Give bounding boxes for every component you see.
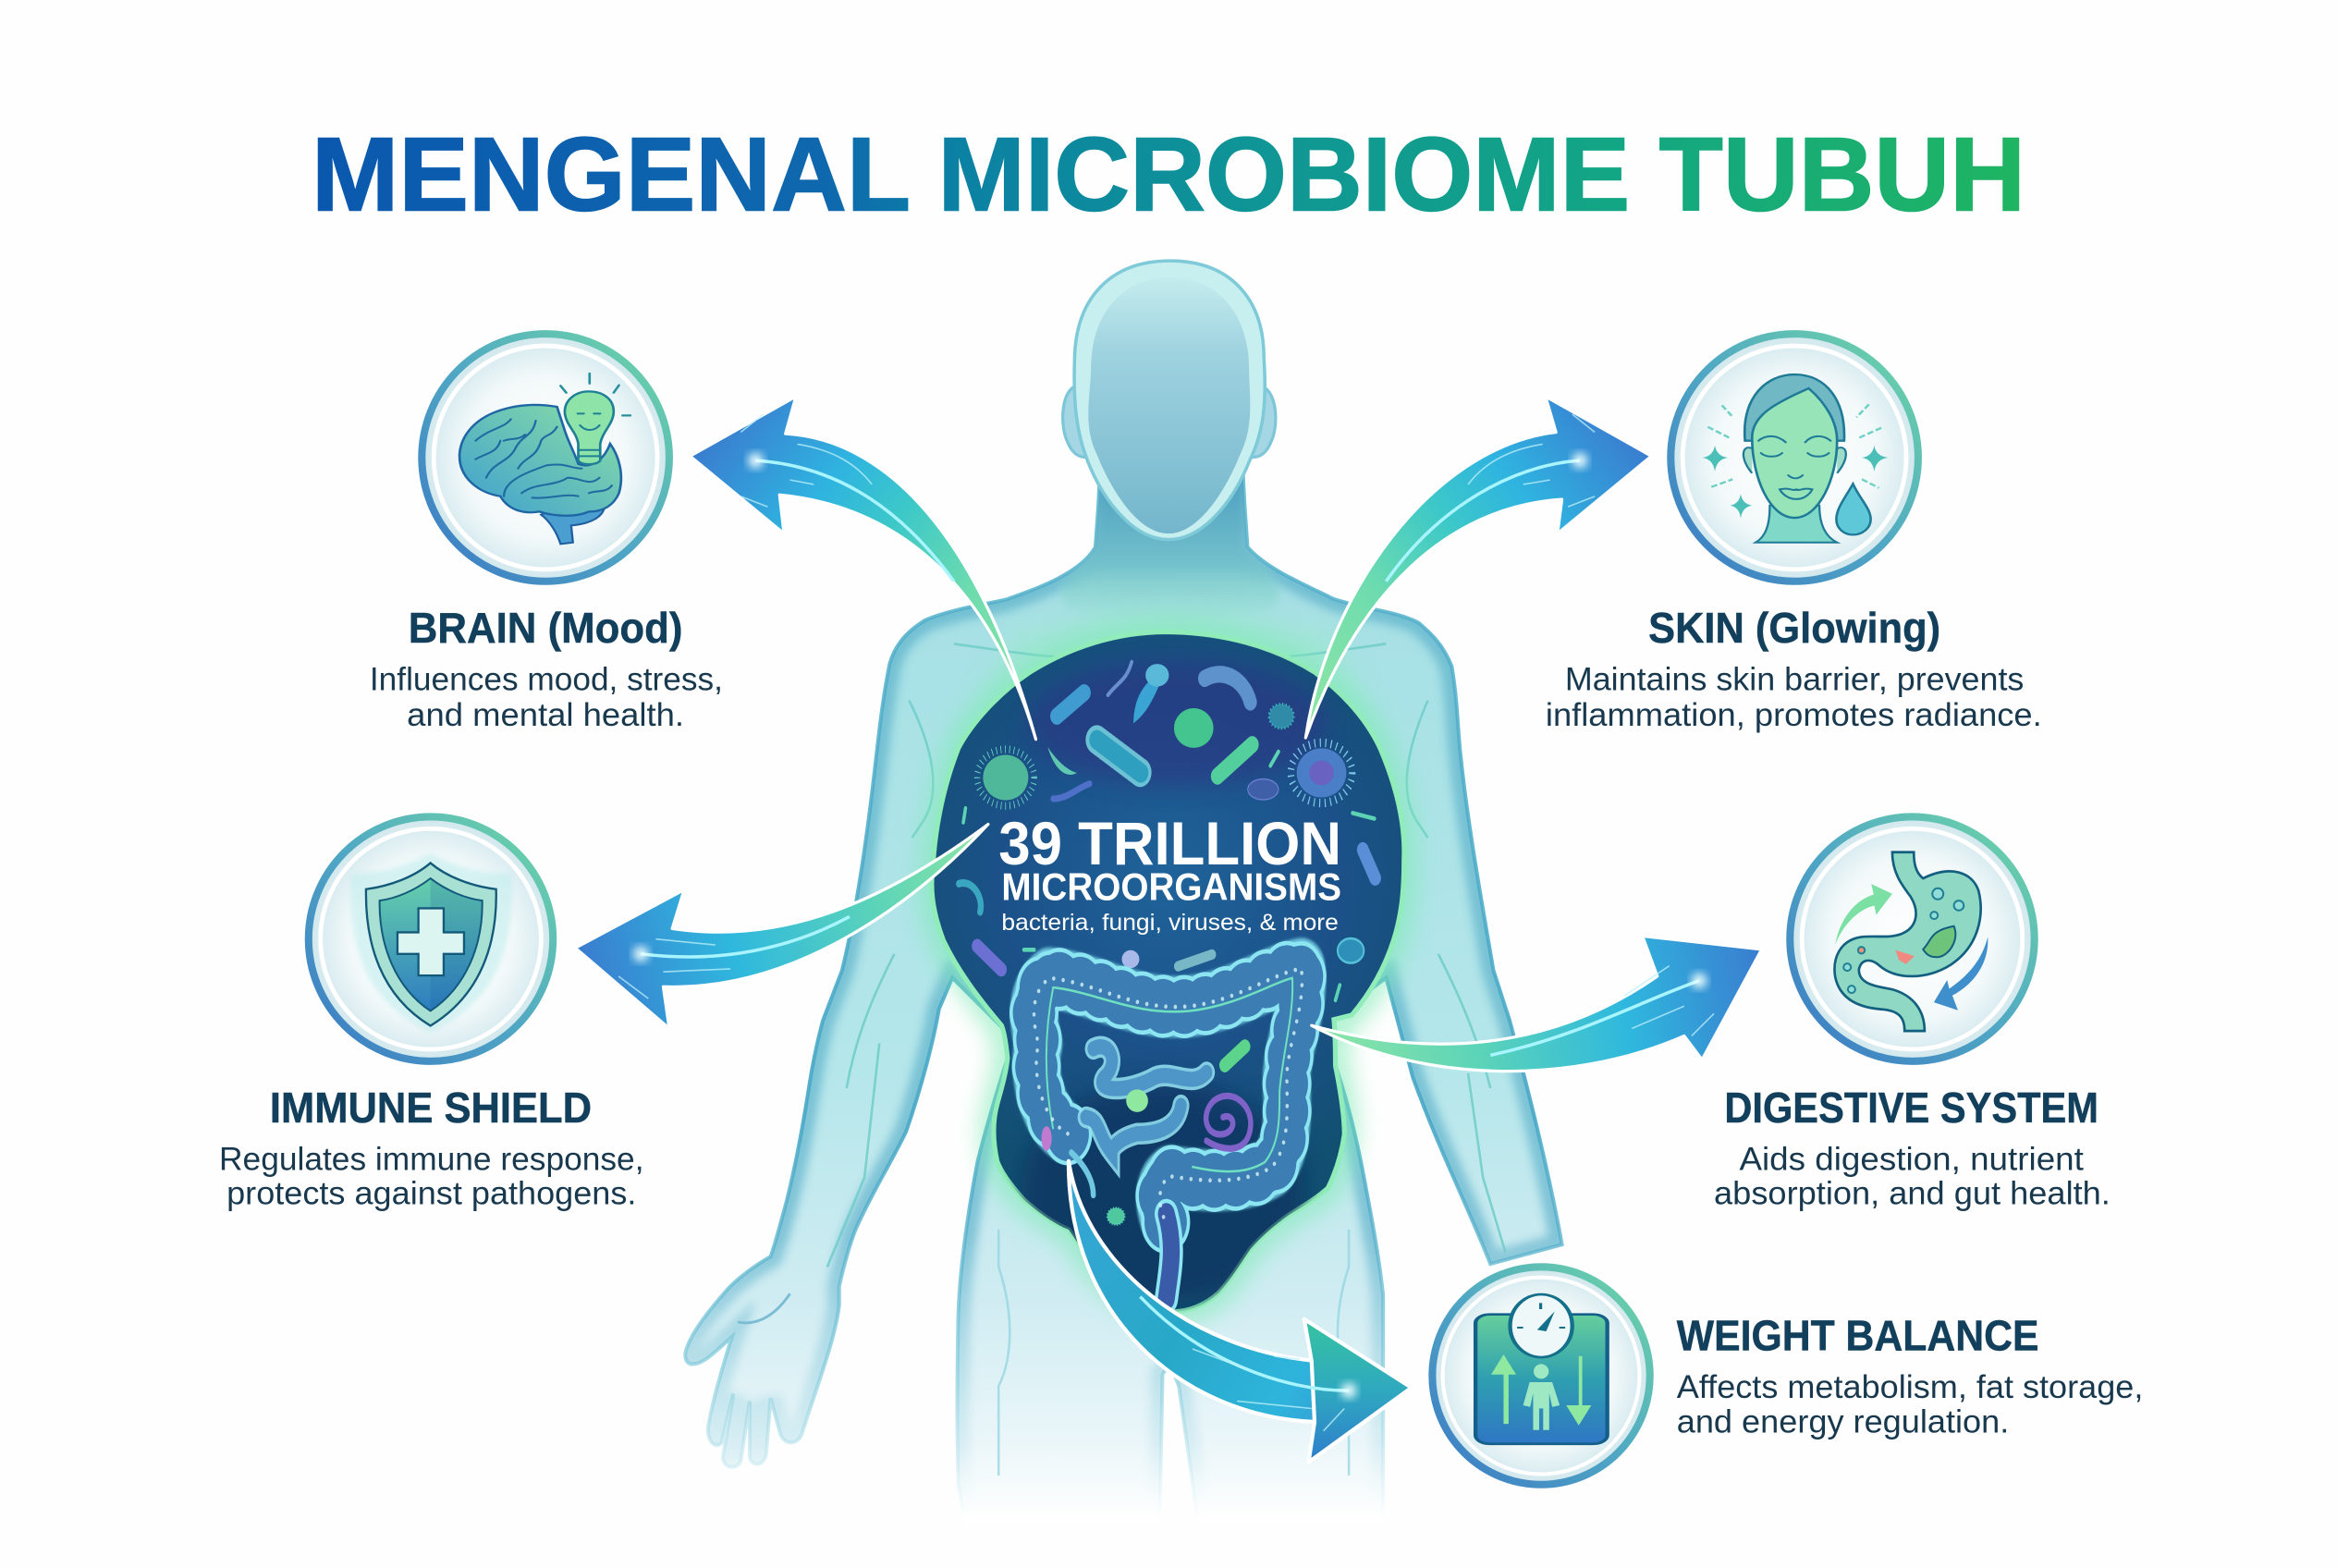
- stomach and intestine: [1835, 852, 1981, 1031]
- dial ticks: [1517, 1303, 1565, 1328]
- arrow shape: [1312, 936, 1762, 1072]
- purple swirl: [1206, 1096, 1251, 1148]
- top tint: [1028, 660, 1327, 786]
- arrow: immune: [575, 825, 988, 1028]
- needle: [1537, 1311, 1555, 1331]
- panel fill: [932, 632, 1404, 1312]
- arrow spark: [1692, 974, 1707, 988]
- description line 1: Regulates immune response,: [219, 1141, 644, 1178]
- ears: [1744, 447, 1846, 473]
- small intestine core: [1086, 1047, 1206, 1153]
- bacterium curved: [1205, 674, 1251, 702]
- green microbe in gut: [1225, 1047, 1245, 1065]
- arrow shaft: [1069, 1161, 1315, 1422]
- arrow glow: [1490, 981, 1699, 1055]
- appendix microbe: [1042, 1126, 1052, 1151]
- arrow spark: [748, 453, 763, 468]
- green spore: [1174, 708, 1214, 748]
- shield aura: [350, 853, 512, 1033]
- disc inner ring: [1443, 1278, 1639, 1474]
- round microbe: [1121, 950, 1139, 968]
- shield drawing: [350, 853, 512, 1033]
- microbe types: bacteria, fungi, viruses, & more: [1001, 910, 1339, 936]
- tiny particles: [963, 752, 1375, 1000]
- description line 1: Maintains skin barrier, prevents: [1565, 660, 2024, 697]
- arrow: brain: [690, 397, 1036, 740]
- icon: digestive stomach: [1790, 816, 2035, 1061]
- circuit traces: [740, 414, 872, 507]
- blue virus: [1291, 742, 1352, 803]
- circuit traces: [1624, 966, 1714, 1035]
- description line 1: Aids digestion, nutrient: [1739, 1141, 2084, 1178]
- palm crease: [738, 1293, 790, 1323]
- description line 2: and energy regulation.: [1677, 1403, 2009, 1439]
- arrow spark: [1341, 1383, 1356, 1398]
- arrow spark: [1572, 453, 1587, 468]
- small lower star: [1107, 1207, 1125, 1225]
- circuit traces: [1468, 414, 1595, 507]
- icon: skin: [1670, 334, 1918, 582]
- count headline: 39 TRILLION: [998, 810, 1341, 878]
- arrow glow: [1386, 460, 1580, 582]
- arrow glow: [641, 916, 850, 957]
- bottom tint: [1021, 1081, 1304, 1305]
- comet: [1107, 662, 1132, 695]
- small virus: [1269, 704, 1294, 729]
- arrow head: [1304, 1319, 1412, 1463]
- human body silhouette: [685, 261, 1562, 1524]
- arrow: skin: [1305, 397, 1651, 738]
- tints: [1021, 660, 1327, 1305]
- arrow shape: [690, 397, 1036, 740]
- disc inner ring: [1682, 346, 1906, 570]
- cross: [398, 908, 464, 975]
- skin disc: [1670, 334, 1918, 582]
- small intestine rim: [1086, 1047, 1206, 1153]
- label: skin: [1546, 604, 2042, 733]
- description line 2: protects against pathogens.: [226, 1175, 636, 1212]
- arrow shape: [575, 825, 988, 1028]
- water drop: [1836, 484, 1871, 534]
- food piece red: [1895, 949, 1915, 964]
- neck: [1756, 506, 1837, 543]
- microbe dots: [1843, 888, 1964, 993]
- cycle arrow green: [1835, 884, 1892, 945]
- anatomy lines: [827, 633, 1505, 1267]
- flagellate head: [1145, 664, 1168, 687]
- disc inner ring: [321, 828, 541, 1049]
- small lower-right virus: [1338, 938, 1364, 963]
- head outer: [1074, 261, 1265, 540]
- dial: [1511, 1294, 1572, 1357]
- panel glow: [932, 632, 1404, 1312]
- rectum core: [1167, 1214, 1171, 1299]
- flagellate: [1133, 671, 1167, 723]
- cerebellum: [541, 504, 605, 544]
- shield outer: [366, 863, 496, 1025]
- rectum: [1167, 1214, 1171, 1299]
- brain folds: [475, 419, 612, 498]
- pale capsule: [1178, 954, 1212, 966]
- brain disc: [422, 334, 669, 582]
- label: immune shield: [219, 1084, 644, 1212]
- colon specks: [1034, 969, 1302, 1223]
- scale body: [1475, 1315, 1608, 1444]
- purple flagellate: [1053, 784, 1090, 799]
- description line 2: absorption, and gut health.: [1714, 1175, 2111, 1212]
- description line 2: inflammation, promotes radiance.: [1546, 696, 2042, 733]
- disc inner ring: [434, 346, 657, 570]
- green virus: [977, 749, 1034, 806]
- scale disc: [1432, 1267, 1650, 1485]
- food piece green: [1923, 926, 1955, 957]
- green bacterium: [1217, 744, 1252, 777]
- description line 1: Influences mood, stress,: [370, 660, 723, 697]
- face: [1752, 388, 1837, 518]
- bacterium blue: [1057, 692, 1084, 717]
- microbiome gut panel: [932, 632, 1404, 1312]
- arrow glow: [1140, 1297, 1349, 1390]
- description line 2: and mental health.: [407, 696, 684, 733]
- heading: WEIGHT BALANCE: [1677, 1312, 2039, 1360]
- icon: immune shield: [309, 816, 553, 1061]
- stomach disc: [1790, 816, 2035, 1061]
- features: [1758, 436, 1830, 499]
- colon interior: [1034, 969, 1302, 1223]
- microorganisms label: MICROORGANISMS: [1001, 865, 1341, 909]
- appendix tail: [1071, 1153, 1094, 1195]
- shield shade: [431, 878, 483, 1011]
- microorganisms: [959, 662, 1376, 1299]
- cycle arrow blue: [1934, 937, 1988, 1011]
- label: digestive system: [1714, 1084, 2111, 1212]
- description line 1: Affects metabolism, fat storage,: [1677, 1368, 2143, 1405]
- purple microbe: [1248, 779, 1279, 800]
- brain drawing: [459, 374, 630, 544]
- arrow: weight: [1069, 1161, 1412, 1463]
- icon: weight scale: [1432, 1267, 1650, 1485]
- title: MENGENAL MICROBIOME TUBUH: [312, 116, 2025, 232]
- person: [1523, 1364, 1560, 1430]
- disc inner ring: [1802, 828, 2023, 1049]
- cerebrum: [459, 405, 621, 516]
- bulb rays: [560, 374, 630, 415]
- body shape: [685, 474, 1562, 1524]
- up arrow: [1491, 1354, 1516, 1424]
- heading: BRAIN (Mood): [409, 604, 682, 652]
- lower body lines: [998, 1230, 1349, 1476]
- ears: [1063, 386, 1276, 457]
- chest glow: [961, 616, 1378, 745]
- arrow shape: [1305, 397, 1651, 738]
- shield disc: [309, 816, 553, 1061]
- label: brain: [370, 604, 723, 733]
- shield inner: [380, 878, 483, 1011]
- label: weight balance: [1677, 1312, 2143, 1439]
- comet microbe: [959, 883, 981, 912]
- colon rim: [1034, 969, 1302, 1223]
- capsule right: [1363, 850, 1376, 878]
- down arrow: [1566, 1356, 1591, 1426]
- heading: IMMUNE SHIELD: [270, 1084, 592, 1132]
- green dot: [1126, 1089, 1148, 1112]
- scale drawing: [1475, 1294, 1608, 1444]
- leaf microbe: [1047, 747, 1077, 775]
- circuit traces: [1193, 1349, 1344, 1431]
- colon glow: [1034, 969, 1302, 1223]
- icon: brain: [422, 334, 669, 582]
- heading: SKIN (Glowing): [1648, 604, 1940, 652]
- glow dashes: [1707, 404, 1881, 488]
- body edge shading: [685, 474, 1562, 1524]
- colon inner strand: [1046, 978, 1292, 1171]
- head inner: [1088, 277, 1250, 533]
- stomach drawing: [1835, 852, 1988, 1031]
- arrow: digestive: [1312, 936, 1762, 1072]
- face drawing: [1703, 374, 1888, 543]
- sparkles: [1703, 446, 1888, 519]
- spiky bacterium: [1097, 740, 1141, 773]
- light bulb: [565, 391, 614, 464]
- hair: [1744, 374, 1844, 441]
- circuit traces: [618, 939, 730, 998]
- capsule purple: [977, 946, 1001, 970]
- arrow glow: [755, 460, 954, 582]
- bulb smile: [578, 413, 600, 456]
- neck: [1061, 481, 1279, 610]
- arrow spark: [633, 947, 648, 962]
- heading: DIGESTIVE SYSTEM: [1724, 1084, 2098, 1132]
